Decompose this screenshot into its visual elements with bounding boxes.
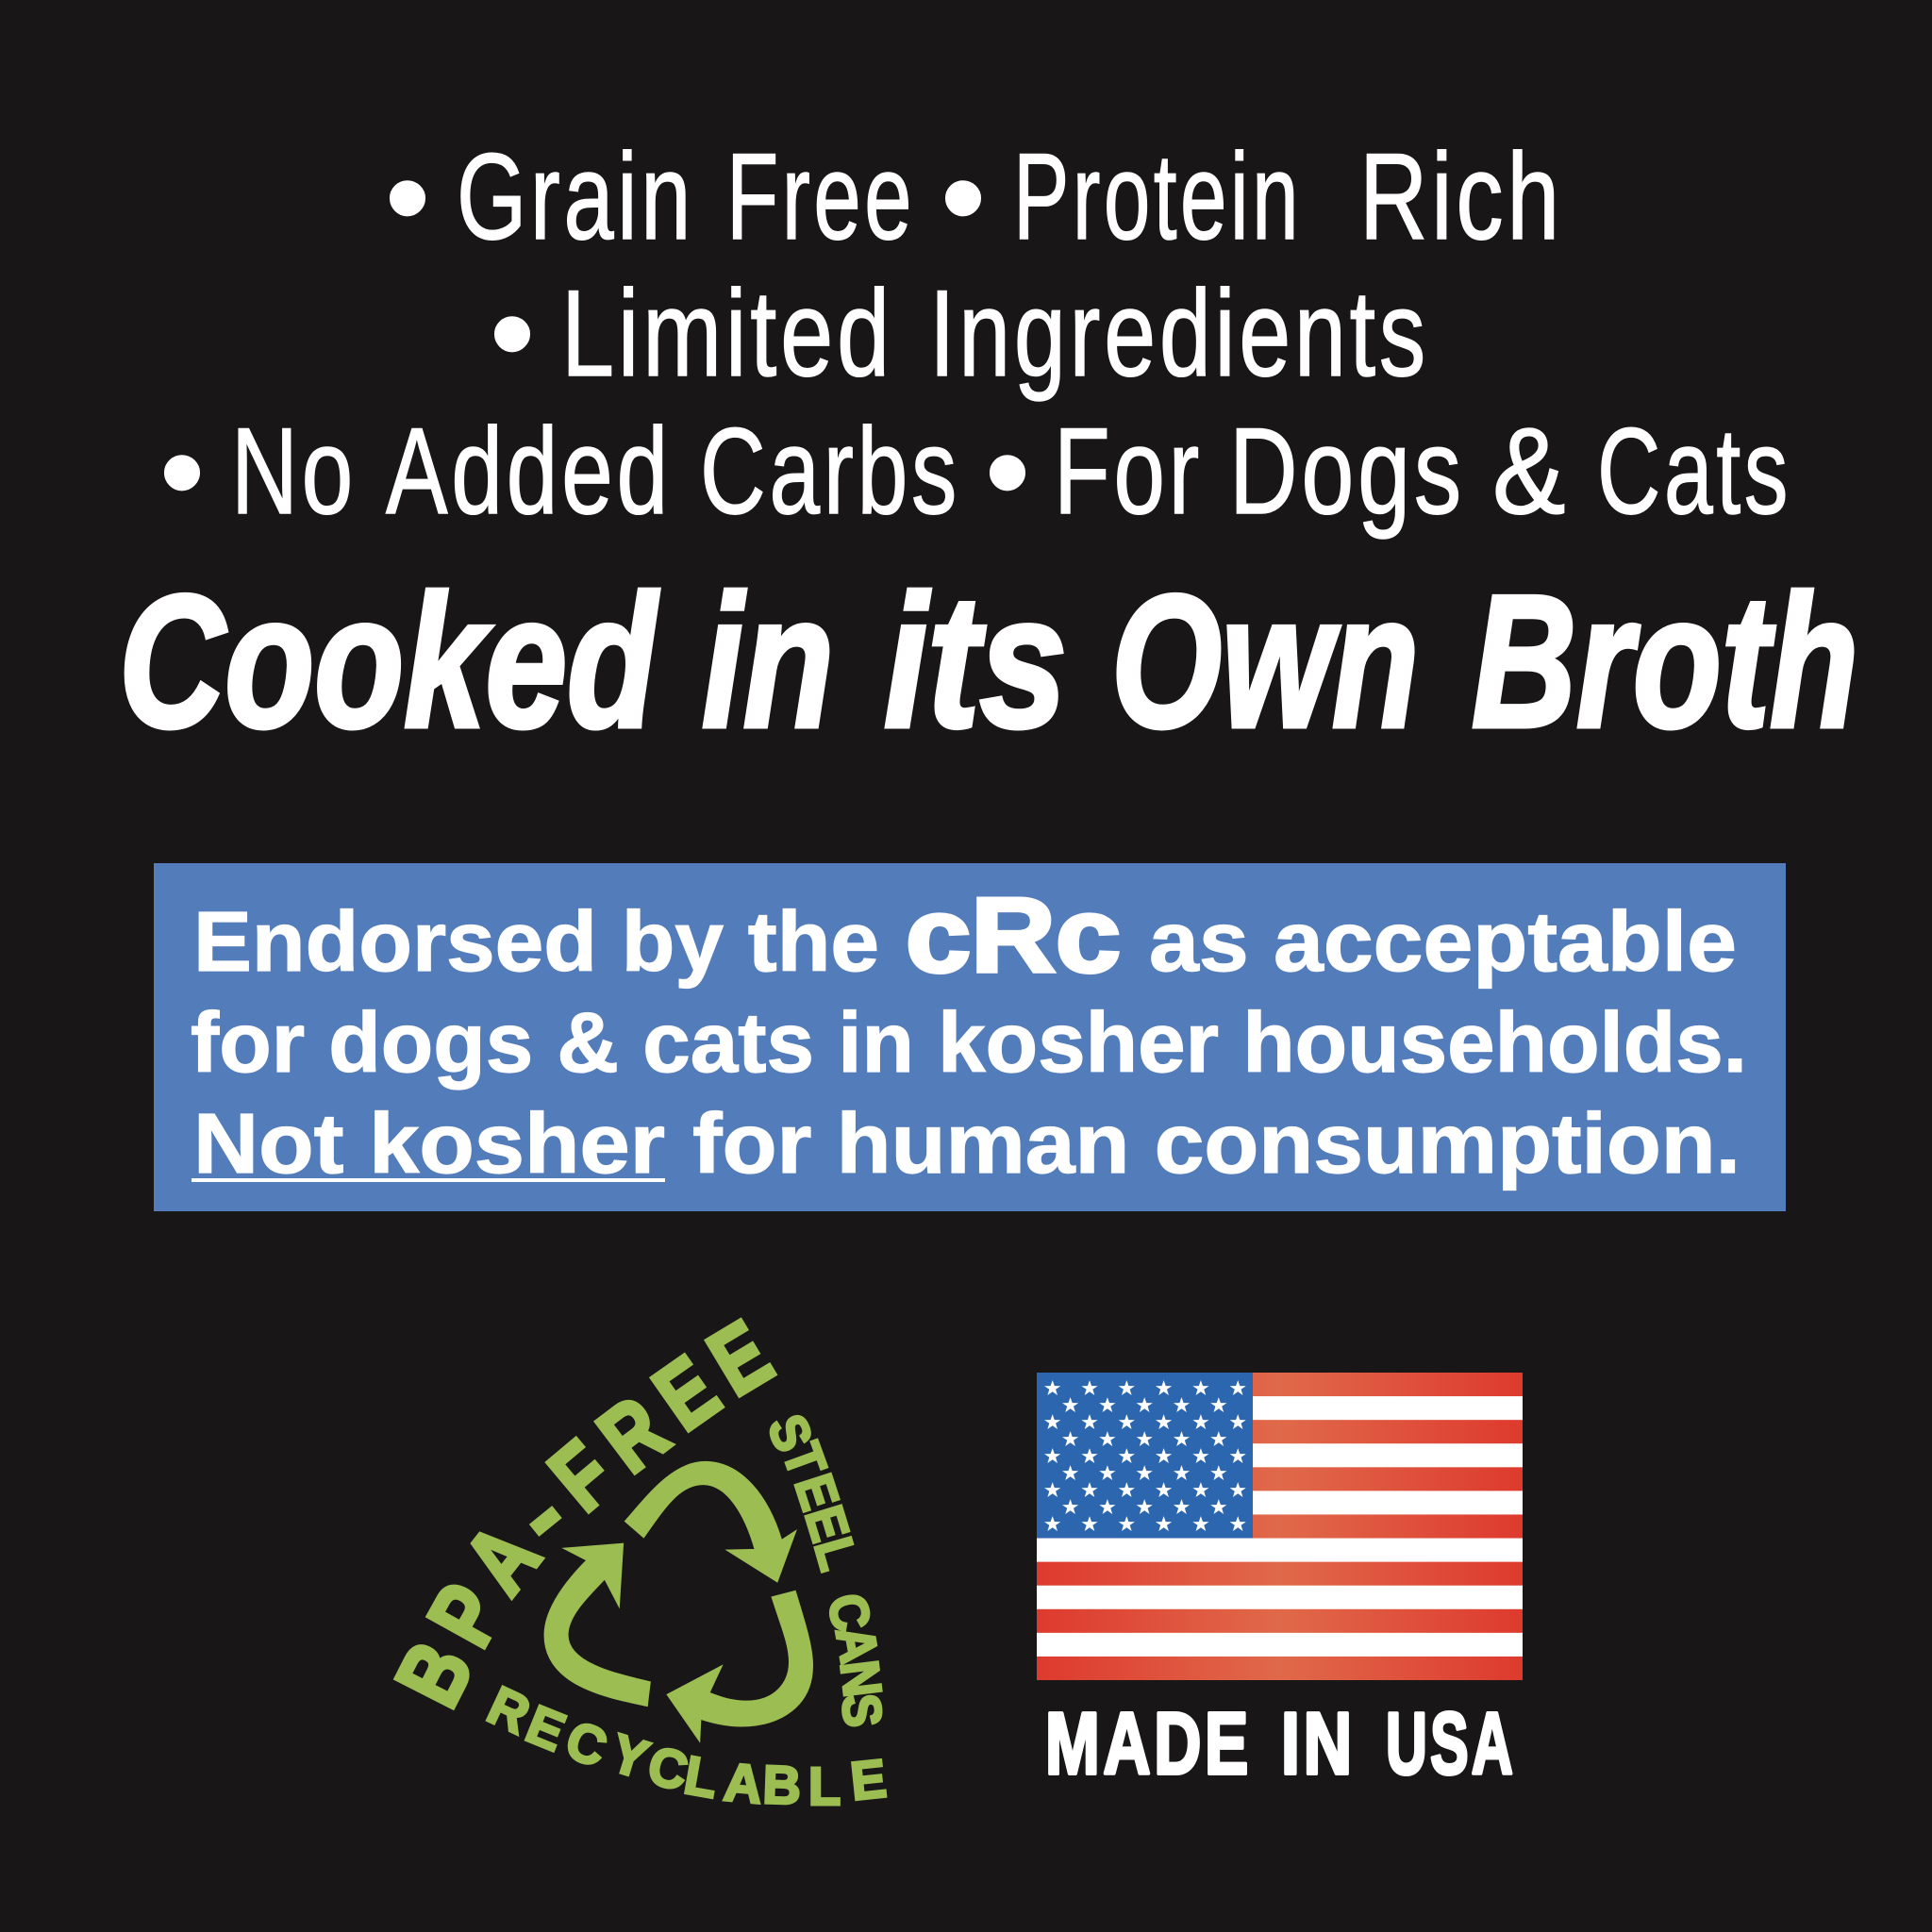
feature list: Grain xyxy=(457,127,694,265)
feature list: No xyxy=(231,402,357,540)
label: BPA-free: E xyxy=(692,1301,788,1415)
icon: American flag xyxy=(1037,1373,1523,1680)
feature list: Limited xyxy=(561,264,893,402)
feature list: Rich xyxy=(1359,127,1563,265)
panel: kosher endorsement: as acceptable xyxy=(1149,895,1737,990)
feature list: • xyxy=(985,400,1030,542)
label: recyclable xyxy=(479,1674,889,1816)
feature list: • xyxy=(159,400,205,542)
label: BPA-free: R xyxy=(580,1377,685,1491)
label: BPA-free: B xyxy=(376,1626,492,1722)
heading: cooked in its own broth: its xyxy=(884,557,1067,767)
label: steel cans: E xyxy=(793,1499,861,1548)
feature list: For xyxy=(1054,402,1203,540)
label: BPA-free: - xyxy=(496,1465,586,1566)
feature list: Protein xyxy=(1013,127,1302,265)
panel: kosher endorsement: cRc xyxy=(906,876,1121,994)
feature list: • xyxy=(385,125,430,268)
label: recyclable: L xyxy=(680,1744,723,1809)
label: BPA-free: F xyxy=(531,1422,632,1530)
label: recyclable: C xyxy=(558,1709,615,1778)
label: steel cans: L xyxy=(803,1531,870,1576)
feature list xyxy=(159,125,1791,542)
panel: kosher endorsement: Not kosher xyxy=(193,1097,665,1191)
label: steel cans: S xyxy=(831,1691,893,1729)
heading: cooked in its own broth xyxy=(119,557,1858,767)
label: recyclable: E xyxy=(518,1693,574,1762)
label: steel cans: C xyxy=(816,1588,883,1637)
feature list: & xyxy=(1492,402,1570,540)
label: recyclable: B xyxy=(762,1755,802,1816)
heading: cooked in its own broth: Cooked xyxy=(119,557,659,767)
label: steel cans: T xyxy=(771,1435,839,1484)
label: BPA-free: P xyxy=(408,1568,523,1661)
panel: kosher endorsement: Endorsed by the xyxy=(193,895,879,990)
panel: kosher endorsement xyxy=(154,863,1786,1211)
label: steel cans: S xyxy=(756,1407,824,1459)
feature list: Dogs xyxy=(1229,402,1465,540)
feature list: Ingredients xyxy=(929,264,1429,402)
label: recyclable: E xyxy=(848,1748,889,1811)
label: recyclable: Y xyxy=(604,1723,656,1790)
label: made in USA: USA xyxy=(1386,1694,1516,1792)
label: steel cans xyxy=(756,1407,893,1729)
panel: kosher endorsement: for dogs & cats in kosher households. xyxy=(191,996,1747,1091)
panel: kosher endorsement: for human consumption. xyxy=(692,1097,1740,1191)
label: recyclable: C xyxy=(642,1735,693,1802)
label: BPA-free xyxy=(376,1301,788,1722)
feature list: Added xyxy=(386,402,672,540)
icon: recycling arrows xyxy=(544,1461,812,1741)
heading: cooked in its own broth: in xyxy=(702,557,834,767)
label: recyclable: A xyxy=(722,1752,765,1815)
feature list: Carbs xyxy=(700,402,960,540)
label: recyclable: L xyxy=(808,1756,841,1816)
label: steel cans: A xyxy=(824,1622,891,1667)
feature list: • xyxy=(490,261,535,404)
icon: BPA-free recyclable logo xyxy=(376,1301,893,1816)
label: made in USA: IN xyxy=(1281,1694,1356,1792)
heading: cooked in its own broth: Own xyxy=(1111,557,1419,767)
feature list: Free xyxy=(726,127,915,265)
feature list: • xyxy=(941,125,986,268)
label: made in USA: MADE xyxy=(1045,1694,1252,1792)
label: BPA-free: A xyxy=(444,1506,558,1611)
label: made in USA xyxy=(1045,1694,1516,1792)
label: steel cans: N xyxy=(829,1657,893,1700)
label: recyclable: R xyxy=(479,1674,539,1745)
label: steel cans: E xyxy=(783,1467,851,1517)
feature list: Cats xyxy=(1597,402,1791,540)
label: BPA-free: E xyxy=(637,1337,736,1449)
